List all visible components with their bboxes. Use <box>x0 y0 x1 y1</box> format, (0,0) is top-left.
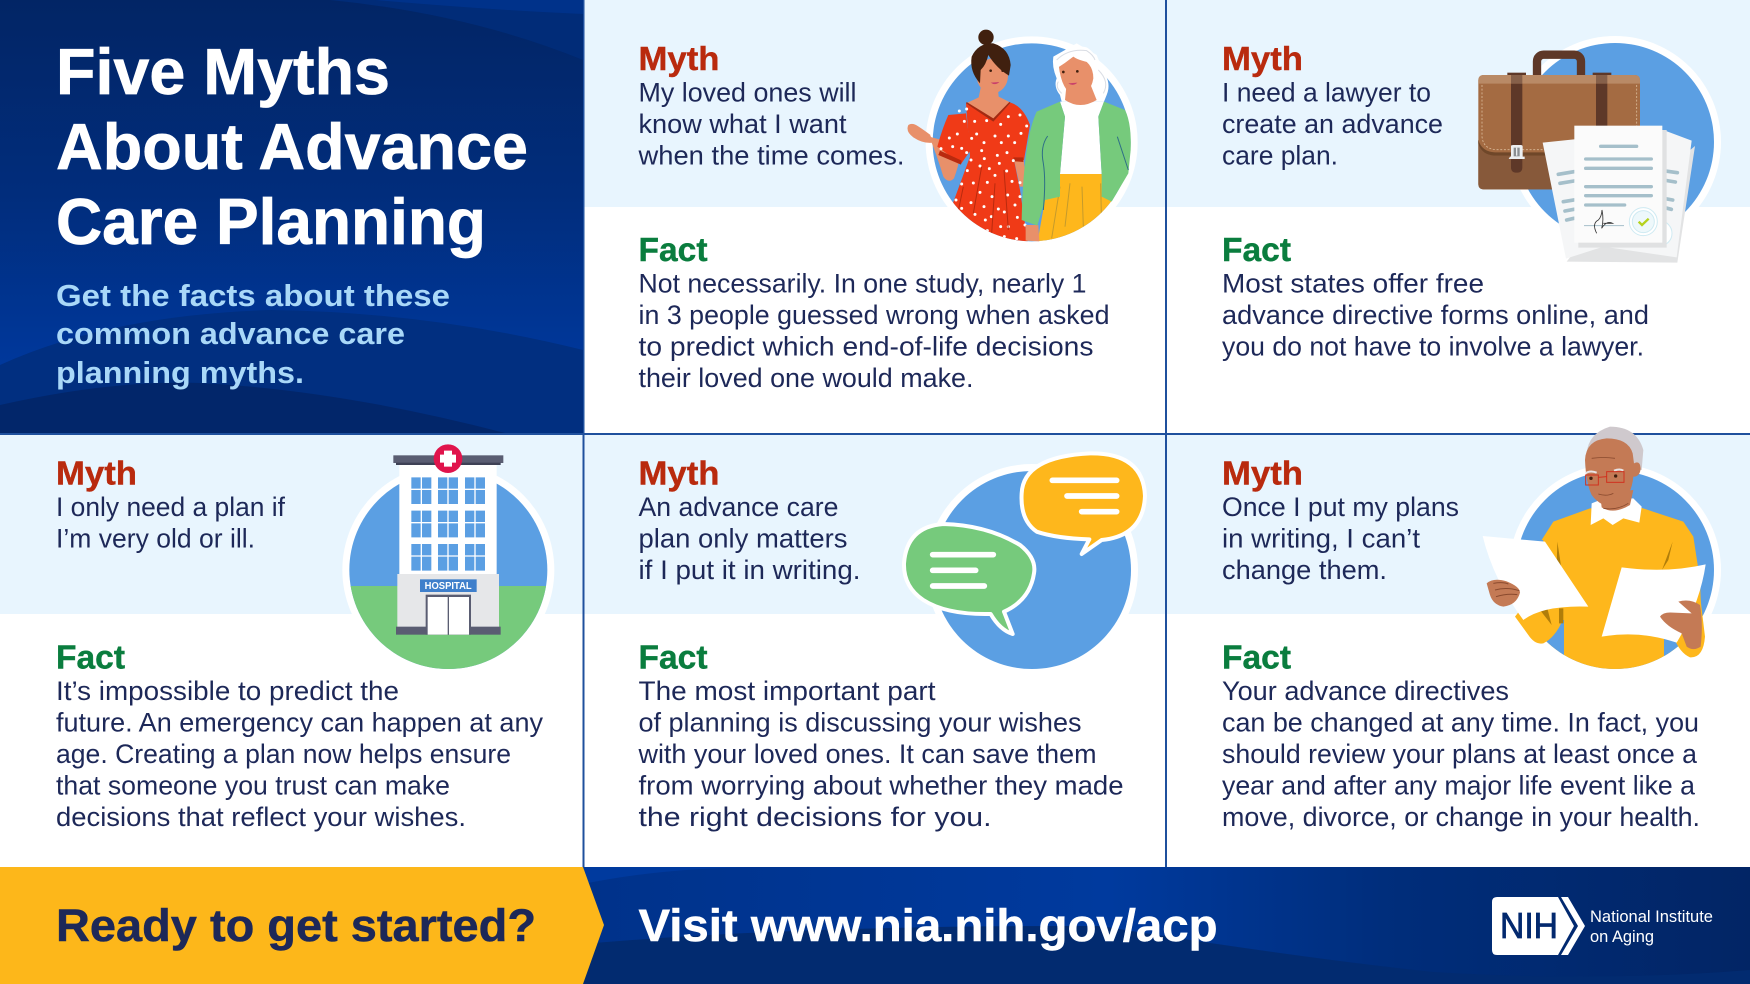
heading: About Advance <box>56 110 528 183</box>
briefcase <box>1478 55 1640 189</box>
fact text <box>1222 676 1700 832</box>
heading: Care Planning <box>56 185 486 258</box>
footer background <box>583 867 1750 984</box>
fact heading: Fact <box>638 638 708 676</box>
subtitle: planning myths. <box>56 355 304 390</box>
head <box>1585 427 1643 525</box>
woman in green cardigan <box>1022 43 1131 247</box>
green bubble <box>904 524 1034 634</box>
fact text: year and after any major life event like a <box>1222 770 1695 800</box>
fact text: you do not have to involve a lawyer. <box>1222 332 1644 362</box>
logo: NIH National Institute on Aging: NIH <box>1500 905 1558 946</box>
icon: man reading papers <box>1483 427 1721 676</box>
myth text <box>637 78 904 170</box>
myth heading: Myth <box>1222 40 1303 77</box>
myth heading: Myth <box>56 454 137 492</box>
subtitle: Get the facts about these <box>56 278 450 313</box>
icon: hospital: HOSPITAL <box>425 581 472 592</box>
myth text: An advance care <box>638 492 838 522</box>
fact text: in 3 people guessed wrong when asked <box>638 300 1110 330</box>
myth text <box>1222 492 1459 585</box>
myth text: I only need a plan if <box>56 492 286 522</box>
left paper and hand <box>1483 536 1588 620</box>
fact text: their loved one would make. <box>638 363 974 393</box>
panel: myth 3 <box>56 444 554 832</box>
fact text: to predict which end-of-life decisions <box>638 332 1094 362</box>
myth text: create an advance <box>1222 109 1443 139</box>
myth heading: Myth <box>638 454 720 492</box>
panel: myth 5 <box>1222 427 1721 832</box>
subtitle: common advance care <box>56 316 405 351</box>
panel: title <box>0 0 583 433</box>
myth text <box>56 492 286 554</box>
fact text: The most important part <box>638 676 936 706</box>
fact text: future. An emergency can happen at any <box>56 708 544 738</box>
myth text: know what I want <box>638 109 847 139</box>
myth text <box>638 492 860 585</box>
fact heading: Fact <box>1222 231 1291 268</box>
myth text: in writing, I can’t <box>1222 524 1421 554</box>
panel: myth 4 <box>637 453 1145 832</box>
heading: Five Myths <box>56 35 390 108</box>
web address: Visit www.nia.nih.gov/acp <box>638 900 1218 951</box>
call to action: Ready to get started? <box>56 900 536 951</box>
fact text: can be changed at any time. In fact, you <box>1222 708 1699 738</box>
myth text: I’m very old or ill. <box>56 524 255 554</box>
subtitle <box>56 278 450 390</box>
panel: myth 1 <box>637 30 1138 393</box>
fact text: with your loved ones. It can save them <box>637 739 1096 769</box>
fact text: It’s impossible to predict the <box>56 676 399 706</box>
logo: NIH National Institute on Aging: National Institute <box>1590 907 1713 926</box>
fact heading: Fact <box>638 231 708 268</box>
woman in red dress <box>908 30 1030 247</box>
fact text: decisions that reflect your wishes. <box>56 802 466 832</box>
sweater <box>1542 508 1701 669</box>
fact heading: Fact <box>56 638 125 676</box>
footer banner <box>0 867 1750 984</box>
yellow bubble <box>1022 453 1145 554</box>
right paper and hand <box>1602 564 1706 649</box>
fact text <box>56 676 544 832</box>
fact text: Not necessarily. In one study, nearly 1 <box>638 268 1086 298</box>
myth text: plan only matters <box>638 524 848 554</box>
fact text: that someone you trust can make <box>56 770 450 800</box>
fact text <box>638 268 1110 393</box>
myth text: if I put it in writing. <box>638 555 860 585</box>
myth heading: Myth <box>1222 454 1303 492</box>
icon: speech bubbles <box>904 453 1145 676</box>
fact text: of planning is discussing your wishes <box>638 708 1082 738</box>
fact heading: Fact <box>1222 638 1291 676</box>
fact text <box>637 676 1124 832</box>
icon: two women <box>908 30 1138 248</box>
icon: hospital <box>342 444 554 676</box>
myth text: when the time comes. <box>637 140 904 170</box>
myth text <box>1222 78 1443 170</box>
fact text: should review your plans at least once a <box>1222 739 1697 769</box>
documents <box>1543 126 1695 263</box>
call to action <box>0 867 604 984</box>
fact text: age. Creating a plan now helps ensure <box>56 739 511 769</box>
fact text: advance directive forms online, and <box>1222 300 1649 330</box>
fact text: the right decisions for you. <box>638 802 992 832</box>
fact text: Most states offer free <box>1222 268 1484 298</box>
fact text: move, divorce, or change in your health. <box>1222 802 1700 832</box>
logo: NIH National Institute on Aging: on Aging <box>1590 927 1654 946</box>
logo: NIH National Institute on Aging <box>1492 897 1713 955</box>
fact text: Your advance directives <box>1222 676 1509 706</box>
panel: myth 2 <box>1222 36 1721 361</box>
icon: briefcase and documents <box>1478 36 1721 263</box>
heading <box>56 35 528 258</box>
myth text: change them. <box>1222 555 1387 585</box>
fact text: from worrying about whether they made <box>638 770 1124 800</box>
myth text: Once I put my plans <box>1222 492 1459 522</box>
myth text: care plan. <box>1222 140 1338 170</box>
myth heading: Myth <box>638 40 720 77</box>
myth text: My loved ones will <box>638 78 856 108</box>
myth text: I need a lawyer to <box>1222 78 1431 108</box>
windows <box>411 477 485 571</box>
fact text <box>1222 268 1649 362</box>
